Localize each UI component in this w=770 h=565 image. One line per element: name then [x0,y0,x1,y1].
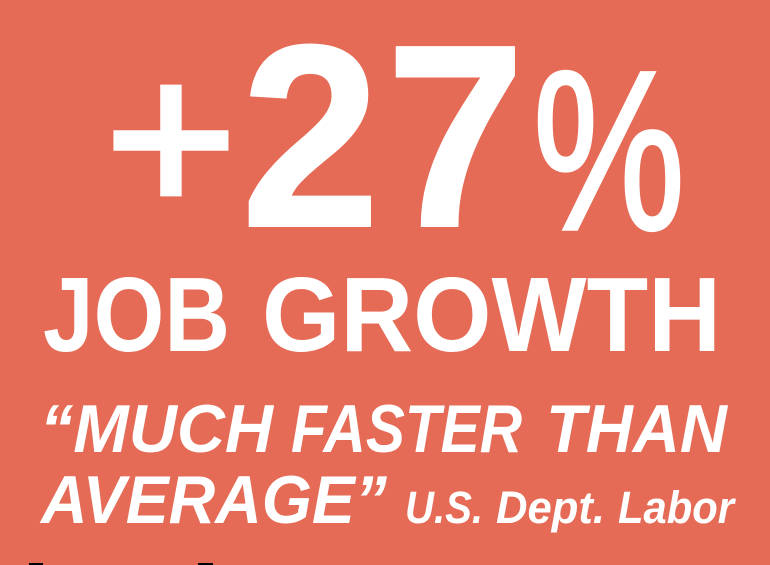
quote line 1: “MUCH [40,391,275,467]
source credit: U.S. [405,482,483,533]
quote line 2: AVERAGE” [39,462,387,538]
heading: job growth: GROWTH [262,256,721,374]
source credit: Labor [618,482,736,533]
big stat: +27% [105,0,685,282]
heading: job growth: JOB [43,256,230,374]
digit 7: 7 [386,0,525,282]
plus sign: + [105,17,237,260]
heading: job growth [43,256,721,374]
cropped black mark right [198,563,213,565]
cropped black mark left [29,563,43,565]
source credit [405,482,736,533]
percent sign: % [533,25,685,278]
source credit: Dept. [496,482,605,533]
quote line 1: THAN [546,391,729,467]
quote line 1 [40,391,729,467]
digit 2: 2 [241,0,380,282]
quote line 1: FASTER [291,391,522,467]
